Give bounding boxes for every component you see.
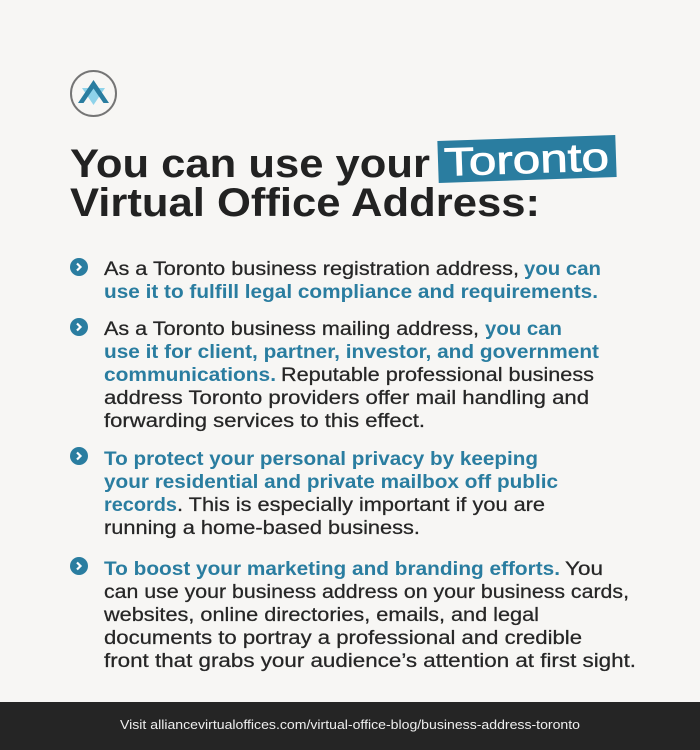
icon: chevron bullet — [70, 258, 88, 276]
bullet 4: To boost your marketing and branding efforts. — [104, 559, 560, 580]
bullet 4 — [70, 557, 636, 672]
highlighted word: Toronto: Toronto — [443, 135, 610, 185]
icon: company logo — [71, 71, 116, 116]
bullet 4: documents to portray a professional and credible — [104, 628, 582, 649]
bullet 1: you can — [524, 259, 601, 280]
bullet 4: websites, online directories, emails, and legal — [103, 605, 539, 626]
bullet 2: Reputable professional business — [281, 365, 594, 386]
icon: chevron bullet — [70, 318, 88, 336]
bullet 2: you can — [485, 319, 562, 340]
title — [70, 135, 617, 225]
title: You can use your — [70, 142, 430, 186]
bullet 3: . This is especially important if you are — [177, 495, 545, 516]
bullet 2: communications. — [104, 365, 276, 386]
title: Virtual Office Address: — [70, 181, 540, 225]
bullet 4: You — [565, 559, 603, 580]
bullet 2: address Toronto providers offer mail handling and — [104, 388, 589, 409]
icon: chevron bullet — [70, 447, 88, 465]
bullet 2: use it for client, partner, investor, and government — [104, 342, 600, 363]
bullet 3: To protect your personal privacy by keeping — [104, 449, 538, 470]
icon: chevron bullet — [70, 557, 88, 575]
bullet 1 — [70, 258, 601, 303]
bullet 3 — [70, 447, 558, 539]
bullet 1: use it to fulfill legal compliance and requirements. — [104, 282, 598, 303]
bullet 2: forwarding services to this effect. — [104, 411, 425, 432]
bullet 3: your residential and private mailbox off public — [104, 472, 558, 493]
bullet 1: As a Toronto business registration address, — [104, 259, 519, 280]
bullet 3: running a home-based business. — [104, 518, 420, 539]
footer bar: Visit alliancevirtualoffices.com/virtual-office-blog/business-address-toronto — [120, 718, 580, 732]
bullet 2: As a Toronto business mailing address, — [104, 319, 479, 340]
bullet 4: front that grabs your audience’s attention at first sight. — [104, 651, 636, 672]
bullet 2 — [70, 318, 600, 432]
footer bar — [0, 702, 700, 750]
bullet 4: can use your business address on your business cards, — [104, 582, 629, 603]
bullet 3: records — [104, 495, 177, 516]
